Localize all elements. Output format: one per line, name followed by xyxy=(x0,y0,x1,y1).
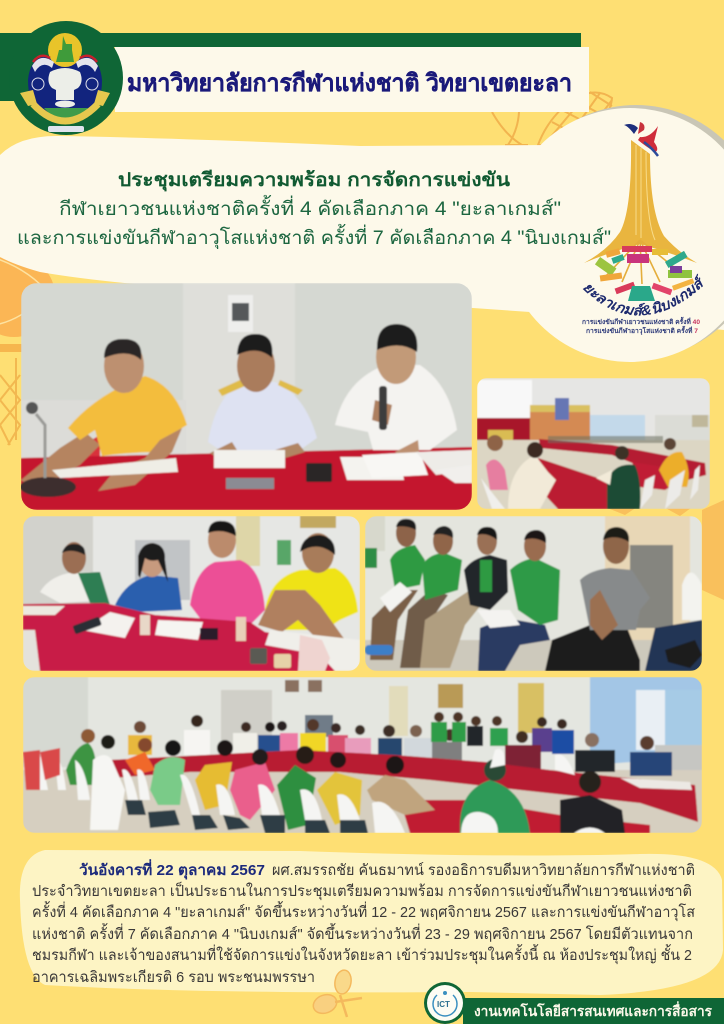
logo subtitle: การแข่งขันกีฬาเยาวชนแห่งชาติ ครั้งที่ 40 xyxy=(582,316,700,326)
description text: ชมรมกีฬา และเจ้าของสนามที่ใช้จัดการแข่งในจังหวัดยะลา เข้าร่วมประชุมในครั้งนี้ ณ ห้องประชุมใหญ่ ชั้น 2 xyxy=(32,944,692,965)
footer bar: งานเทคโนโลยีสารสนเทศและการสื่อสาร xyxy=(474,1001,712,1019)
description text: อาคารเฉลิมพระเกียรติ 6 รอบ พระชนมพรรษา xyxy=(32,969,315,986)
event logo: Yala Games and Nibong Games xyxy=(582,122,703,335)
photo: three officials at head table xyxy=(20,283,472,510)
description date lead: วันอังคารที่ 22 ตุลาคม 2567 xyxy=(79,859,265,880)
ICT logo xyxy=(424,982,466,1024)
cream description blob xyxy=(20,850,723,995)
ICT logo: ICT xyxy=(437,1000,450,1009)
description text: ผศ.สมรรถชัย คันธมาทน์ รองอธิการบดีมหาวิทยาลัยการกีฬาแห่งชาติ xyxy=(272,862,695,879)
event headline: ประชุมเตรียมความพร้อม การจัดการแข่งขัน xyxy=(118,169,510,192)
event headline: และการแข่งขันกีฬาอาวุโสแห่งชาติ ครั้งที่ 7 คัดเลือกภาค 4 "นิบงเกมส์" xyxy=(17,224,611,250)
description text: ประจำวิทยาเขตยะลา เป็นประธานในการประชุมเตรียมความพร้อม การจัดการแข่งขันกีฬาเยาวชนแห่งชาติ xyxy=(32,881,692,901)
photo: meeting room wide view xyxy=(477,378,710,509)
event logo circle xyxy=(503,105,724,362)
logo bird xyxy=(624,122,658,156)
header green band xyxy=(0,33,581,101)
decoration: tennis rackets top right xyxy=(492,92,612,145)
description text: แห่งชาติ ครั้งที่ 7 คัดเลือกภาค 4 "นิบงเกมส์" จัดขึ้นระหว่างวันที่ 23 - 29 พฤศจิกายน 2567 โดยมีตัวแทนจาก xyxy=(32,923,693,943)
photo: full meeting room round table xyxy=(23,677,702,833)
footer bar xyxy=(463,998,724,1024)
photo: table with four attendees xyxy=(23,516,360,671)
logo subtitle xyxy=(582,316,700,335)
logo tower xyxy=(584,140,697,284)
description text xyxy=(32,859,695,986)
logo subtitle: การแข่งขันกีฬาอาวุโสแห่งชาติ ครั้งที่ 7 xyxy=(586,325,698,335)
logo wordmark: ยะลาเกมส์&นิบงเกมส์ xyxy=(582,274,703,316)
photo: attendees in green shirts xyxy=(365,516,702,671)
cream title blob xyxy=(0,136,724,330)
event headline xyxy=(17,169,611,250)
decoration: basketball xyxy=(0,255,55,337)
decoration: crossed rackets xyxy=(311,969,362,1017)
header title bar xyxy=(115,47,589,112)
university emblem xyxy=(9,21,123,135)
header title bar: มหาวิทยาลัยการกีฬาแห่งชาติ วิทยาเขตยะลา xyxy=(127,70,572,97)
description text: ครั้งที่ 4 คัดเลือกภาค 4 "ยะลาเกมส์" จัดขึ้นระหว่างวันที่ 12 - 22 พฤศจิกายน 2567 และการแข่งขันกีฬาอาวุโส xyxy=(32,901,695,922)
logo colour blocks xyxy=(595,246,694,301)
decoration: basketball net xyxy=(0,344,22,445)
decoration: orange shapes right xyxy=(600,500,724,600)
event headline: กีฬาเยาวชนแห่งชาติครั้งที่ 4 คัดเลือกภาค 4 "ยะลาเกมส์" xyxy=(59,195,561,220)
